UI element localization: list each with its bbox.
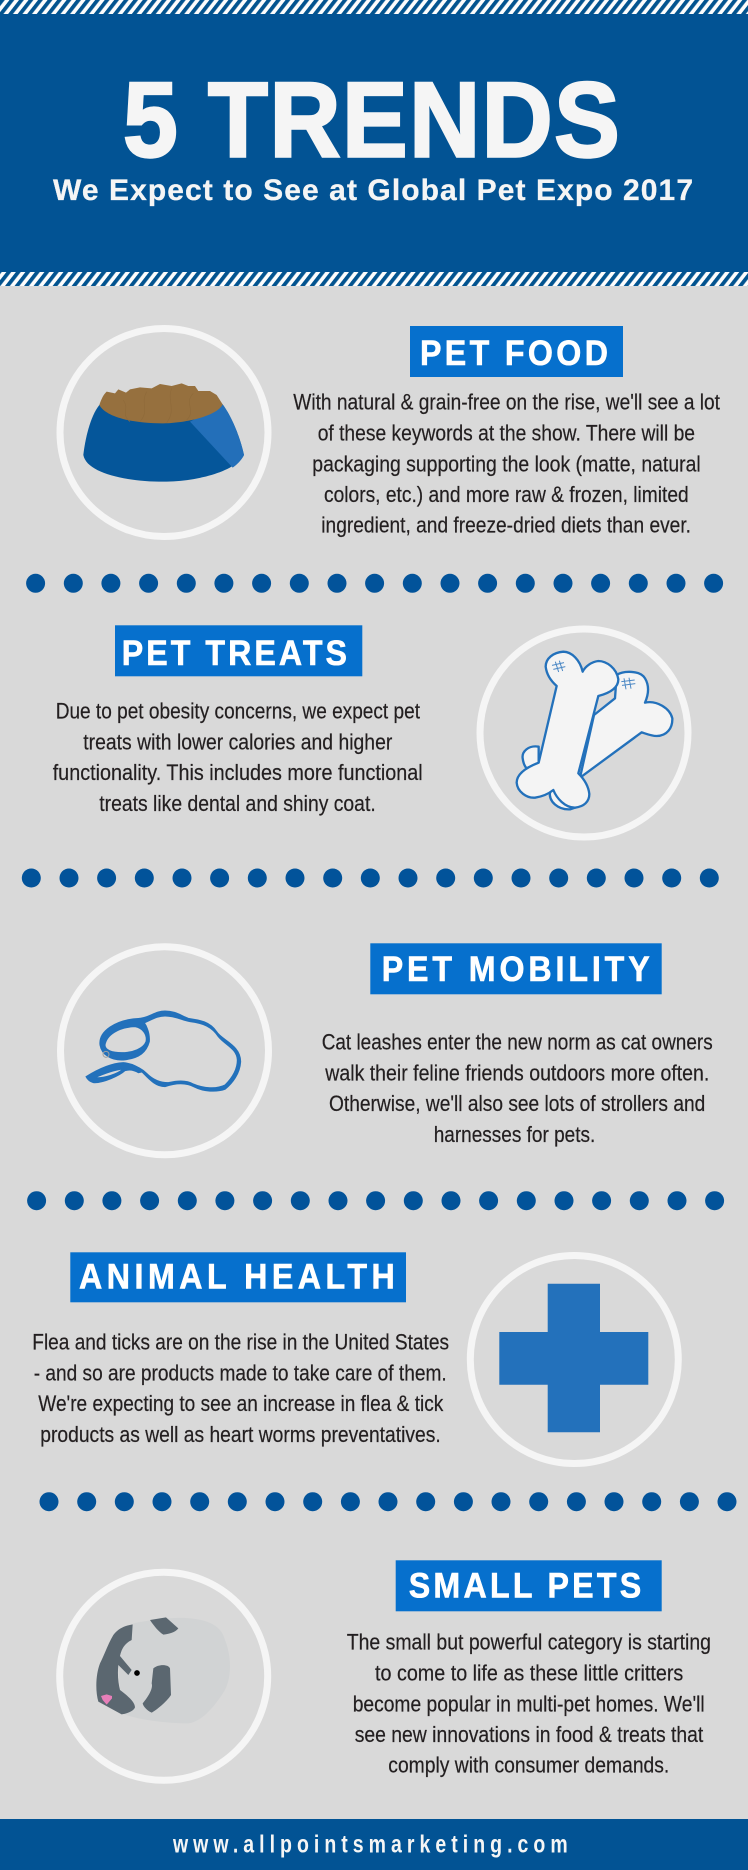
icon: leash <box>60 947 268 1155</box>
text: animal health: Flea and ticks are on the rise in the United States <box>32 1329 449 1354</box>
heading: pet treats: PET TREATS <box>122 635 347 673</box>
text: small pets: to come to life as these little critters <box>375 1660 683 1685</box>
heading: small pets: SMALL PETS <box>409 1567 641 1606</box>
text: animal health <box>32 1329 449 1447</box>
panel: pet mobility <box>60 943 713 1155</box>
text: pet treats: functionality. This includes more functional <box>53 760 423 785</box>
text: pet mobility: walk their feline friends outdoors more often. <box>324 1060 709 1085</box>
panel: pet food <box>60 326 720 538</box>
title: 5 TRENDS <box>123 60 620 179</box>
icon: guinea pig <box>60 1572 268 1780</box>
text: animal health: products as well as heart worms preventatives. <box>40 1422 441 1447</box>
subtitle: We Expect to See at Global Pet Expo 2017 <box>53 174 693 207</box>
header banner <box>0 0 748 286</box>
text: pet treats: treats like dental and shiny coat. <box>99 791 376 816</box>
text: pet mobility: harnesses for pets. <box>434 1122 595 1147</box>
text: pet treats: treats with lower calories and higher <box>83 729 392 754</box>
text: pet treats: Due to pet obesity concerns, we expect pet <box>56 698 420 723</box>
panel: small pets <box>60 1560 711 1780</box>
text: animal health: We're expecting to see an increase in flea & tick <box>38 1391 444 1416</box>
panel: animal health <box>32 1252 678 1464</box>
heading: pet mobility: PET MOBILITY <box>382 951 650 989</box>
text: pet food: colors, etc.) and more raw & frozen, limited <box>324 482 689 507</box>
heading: pet mobility <box>370 943 662 994</box>
text: pet food: packaging supporting the look (matte, natural <box>312 451 701 476</box>
footer <box>0 1819 748 1870</box>
heading: animal health: ANIMAL HEALTH <box>79 1259 395 1297</box>
text: animal health: - and so are products made to take care of them. <box>34 1360 447 1385</box>
heading: pet food <box>410 326 623 377</box>
heading: pet treats <box>115 625 362 676</box>
icon: medical cross <box>470 1256 678 1464</box>
text: pet food: ingredient, and freeze-dried diets than ever. <box>321 513 691 538</box>
heading: small pets <box>396 1560 662 1611</box>
text: small pets: comply with consumer demands. <box>388 1753 669 1778</box>
text: small pets: see new innovations in food & treats that <box>355 1722 703 1747</box>
heading: pet food: PET FOOD <box>420 335 608 373</box>
text: small pets <box>347 1629 711 1778</box>
icon: bones <box>480 629 688 837</box>
text: pet treats <box>53 698 423 816</box>
footer: www.allpointsmarketing.com <box>172 1830 568 1858</box>
panel: pet treats <box>53 625 688 837</box>
text: small pets: The small but powerful category is starting <box>347 1629 711 1654</box>
icon: food bowl <box>60 328 268 536</box>
text: pet food: of these keywords at the show. There will be <box>318 420 695 445</box>
text: pet mobility <box>322 1029 713 1147</box>
text: pet food <box>293 389 720 538</box>
text: small pets: become popular in multi-pet homes. We'll <box>353 1691 705 1716</box>
